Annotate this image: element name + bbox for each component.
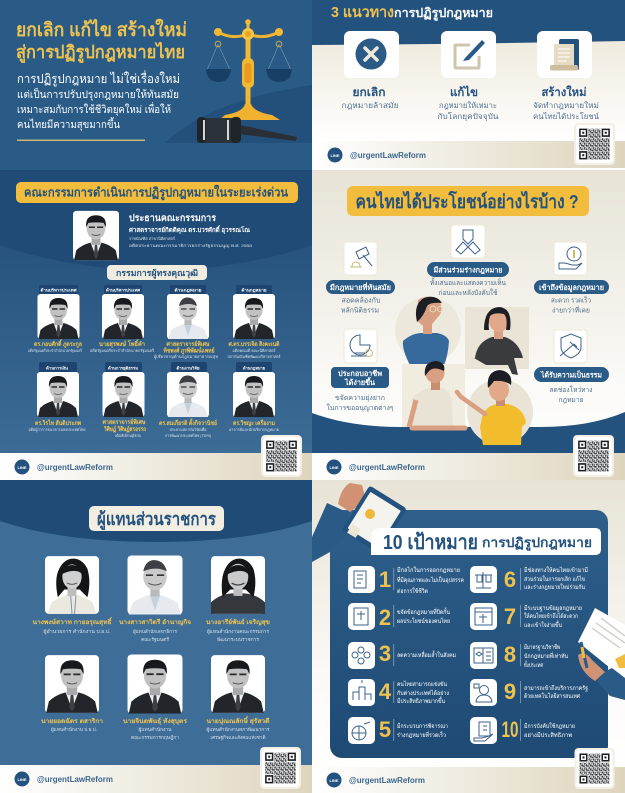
member 4: ด้านกฎหมาย <box>242 286 267 294</box>
benefit: access: ง่ายกว่าที่เคย <box>552 306 590 314</box>
QR code <box>261 435 302 477</box>
intro text: เหมาะสมกับการใช้ชีวิตยุคใหม่ เพื่อให้ <box>17 102 171 116</box>
benefit: access <box>534 242 609 314</box>
pill heading: ผู้แทนส่วนราชการ <box>97 509 217 531</box>
member 2: ด้านบริหารประเทศ <box>106 286 140 292</box>
goal 3 <box>348 641 456 669</box>
member 3: ศาสตราจารย์พิเศษ <box>166 340 210 348</box>
goal 9: ด้วยเทคโนโลยีสารสนเทศ <box>524 692 580 700</box>
goal 1: ต่อการใช้ชีวิต <box>397 587 428 595</box>
member 8: อาจารย์และนักบริหารกฎหมาย <box>229 427 279 432</box>
benefit: justice: กฎหมาย <box>558 397 584 404</box>
chair: ศาสตราจารย์กิตติคุณ ดร.บวรศักดิ์ อุวรรณโณ <box>129 225 250 234</box>
member 8: ด้านกฎหมาย <box>243 364 266 372</box>
title pill <box>371 528 601 555</box>
footer: @urgentLawReform <box>37 463 113 472</box>
member 5 <box>28 362 86 433</box>
goal 1 <box>348 566 464 595</box>
goal 5: 5 <box>379 717 391 742</box>
goal 4: 4 <box>379 679 392 704</box>
chair: ประธานคณะกรรมการ <box>129 212 217 224</box>
footer: LINE <box>17 465 27 470</box>
heading <box>16 18 187 64</box>
member 3: ทิชพงศ์ ภูรพิพัฒน์แพทย์ <box>164 346 215 356</box>
card: create: สร้างใหม่ <box>542 85 586 99</box>
member 7: ดร.สมเกียรติ ตั้งกิจวานิชย์ <box>159 417 217 427</box>
chair <box>73 211 253 260</box>
member 4: ศ.ดร.บรรเจิด สิงคะเนติ <box>228 340 280 348</box>
card: create: คนไทยได้ประโยชน์ <box>533 112 599 121</box>
icon: gavel <box>197 117 297 143</box>
icon: scales of justice <box>206 19 292 120</box>
banner <box>347 186 589 216</box>
member 1: อดีตรัฐมนตรีประจำสำนักนายกรัฐมนตรี <box>28 348 83 353</box>
goal 4 <box>348 679 449 706</box>
QR code <box>573 435 614 477</box>
goal 8 <box>470 642 568 669</box>
representative 6: ผู้แทนสำนักงานสภาพัฒนาการ <box>206 726 270 733</box>
paper with pen <box>578 608 625 700</box>
intro text: การปฏิรูปกฎหมาย ไม่ใช่เรื่องใหม่ <box>17 70 180 87</box>
benefit: modern law: สอดคล้องกับ <box>342 296 380 304</box>
illustration: woman in black <box>465 307 529 375</box>
icon: scroll <box>550 39 579 70</box>
goal 9: สามารถเข้าถึงบริการภาครัฐ <box>524 685 588 692</box>
footer: @urgentLawReform <box>37 775 113 784</box>
dark card <box>330 510 608 758</box>
member 2: นายสุรพงษ์ โพธิ์คำ <box>99 339 145 348</box>
title pill: 10 เป้าหมาย <box>383 531 478 554</box>
goal 7 <box>470 603 582 630</box>
illustration: man in yellow <box>457 370 533 445</box>
goal 8: 8 <box>504 642 516 667</box>
chair: ราชบัณฑิต สาขานิติศาสตร์ <box>129 236 176 241</box>
member 5: ดร.วิรไท สันติประภพ <box>35 419 81 427</box>
card: amend <box>438 31 498 121</box>
card: amend: แก้ไข <box>450 85 478 99</box>
heading: 3 แนวทาง <box>331 4 394 21</box>
goal 2: 2 <box>379 605 391 630</box>
member 3: ด้านกฎหมาย <box>174 286 202 294</box>
member 7: ประธานสถาบันวิจัยเพื่อ <box>170 427 207 432</box>
footer: LINE <box>17 777 27 782</box>
goal 5: ร่างกฎหมายที่รวดเร็ว <box>397 730 446 739</box>
heading <box>331 4 493 21</box>
benefit: justice <box>534 330 609 404</box>
member 4: อดีตคณบดี คณะนิติศาสตร์ <box>232 348 276 353</box>
subheading pill <box>107 265 207 280</box>
footer: @urgentLawReform <box>349 776 425 785</box>
goal 8: มีมาตรฐานวิชาชีพ <box>524 643 560 651</box>
member 2: อดีตรัฐมนตรีประจำสำนักนายกรัฐมนตรี <box>90 348 155 353</box>
card: amend: กฎหมายให้เหมาะ <box>439 101 497 110</box>
member 8: ดร.วิชญะ เครืองาม <box>233 419 275 427</box>
goal 8: ทั้งประเทศ <box>524 659 543 669</box>
representative 1 <box>32 556 113 635</box>
goal 1: ที่มีคุณภาพและไม่เป็นอุปสรรค <box>397 575 464 584</box>
benefit: access: สะดวก รวดเร็ว <box>551 296 591 304</box>
footer: @urgentLawReform <box>350 151 426 160</box>
benefit: participation <box>427 225 509 297</box>
icon: shield gavel <box>560 334 581 358</box>
representative 6: เศรษฐกิจและสังคมแห่งชาติ <box>210 734 266 741</box>
tablet with hand <box>312 483 407 562</box>
goal 10 <box>470 717 575 744</box>
footer <box>312 767 625 793</box>
goal 7: มีระบบฐานข้อมูลกฎหมาย <box>524 604 582 612</box>
curved shape behind scale <box>165 85 312 143</box>
intro text: แต่เป็นการปรับปรุงกฎหมายให้ทันสมัย <box>17 87 179 101</box>
card: create <box>533 31 599 121</box>
representative 2: นางสาวสาวิตรี อำนาญกิจ <box>119 618 191 626</box>
goal 2 <box>348 603 450 630</box>
representative 4: นายยอดฉัตร ตสาริกา <box>41 717 104 725</box>
representative 2: คณะรัฐมนตรี <box>141 636 170 643</box>
member 4 <box>228 285 281 359</box>
footer <box>0 453 312 480</box>
panel: 10 goals <box>312 480 625 793</box>
footer: LINE <box>329 778 339 783</box>
goal 2: ขจัดข้อกฎหมายที่ปิดกั้น <box>397 606 450 616</box>
banner: คนไทยได้ประโยชน์อย่างไรบ้าง ? <box>356 190 578 212</box>
benefit: livelihood <box>326 329 394 412</box>
goal 6: และร่างกฎหมายใหม่ร่วมกัน <box>524 583 585 591</box>
footer: LINE <box>329 465 339 470</box>
member 6 <box>102 362 146 439</box>
panel: government representatives <box>0 480 312 793</box>
member 1: ด้านบริหารประเทศ <box>40 286 77 292</box>
goal 4: กับต่างประเทศได้อย่าง <box>397 689 449 697</box>
benefit: modern law: มีกฎหมายที่ทันสมัย <box>330 281 391 292</box>
card: abolish <box>342 31 399 110</box>
goal 9 <box>470 679 588 706</box>
member 7: ด้านงานวิจัย <box>176 364 200 370</box>
member 5: ด้านการเงิน <box>46 364 68 370</box>
representative 6: นายปุณณลักษิ์ สุรัสวดี <box>206 716 270 725</box>
representative 1: ผู้อำนวยการ สำนักงาน ป.ย.ป. <box>44 628 110 635</box>
representative 2 <box>119 556 191 643</box>
member 3 <box>154 285 218 360</box>
QR code <box>574 123 615 165</box>
goal 10: อย่างมีประสิทธิภาพ <box>524 731 572 739</box>
benefit: modern law <box>326 242 395 314</box>
representative 6 <box>206 655 270 741</box>
QR code <box>260 747 301 789</box>
icon: pie and coins <box>350 335 372 356</box>
representative 4 <box>41 655 104 733</box>
card: abolish: กฎหมายล้าสมัย <box>342 101 398 110</box>
benefit: livelihood: ได้ง่ายขึ้น <box>344 376 376 387</box>
QR code <box>574 748 614 789</box>
illustration: man in beige <box>402 361 465 428</box>
footer <box>312 453 625 480</box>
banner <box>16 182 298 203</box>
heading: สู่การปฏิรูปกฎหมายไทย <box>16 41 185 64</box>
representative 3: ผู้แทนสำนักงานคณะกรรมการ <box>207 628 270 635</box>
goal 6: 6 <box>504 567 516 592</box>
benefit: access: เข้าถึงข้อมูลกฎหมาย <box>539 283 604 293</box>
goal 4: คนไทยสามารถแข่งขัน <box>397 680 447 688</box>
goal 6: ส่วนร่วมในการยกเลิก แก้ไข <box>524 575 585 583</box>
icon: edit <box>455 40 485 68</box>
heading: ยกเลิก แก้ไข สร้างใหม่ <box>16 18 187 40</box>
card: abolish: ยกเลิก <box>352 86 386 99</box>
panel: committee <box>0 170 312 480</box>
goal 6 <box>470 566 588 593</box>
chair: อดีตประธานคณะกรรมาธิการยกร่างรัฐธรรมนูญ พ.ศ. 2558 <box>129 243 253 249</box>
icon: gavel <box>350 247 372 267</box>
member 6: วิศิษฏ์ วิศิษฏ์สรอรรถ <box>104 425 146 433</box>
member 2 <box>90 285 155 353</box>
card: create: จัดทำกฎหมายใหม่ <box>533 101 599 110</box>
member 6: ศาสตราจารย์พิเศษ <box>102 418 146 426</box>
goal 1: มีกลไกในการออกกฎหมาย <box>397 566 460 574</box>
goal 3: 3 <box>379 641 391 666</box>
member 8 <box>229 362 279 432</box>
goal 7: และเข้าใจง่ายขึ้น <box>524 619 562 629</box>
representative 1: นางพงษ์สวาท กายอรุณสุทธิ์ <box>32 617 113 626</box>
panel: benefits <box>312 170 625 480</box>
intro text: คนไทยมีความสุขมากขึ้น <box>17 117 120 131</box>
benefit: livelihood: ขจัดความยุ่งยาก <box>335 394 385 402</box>
member 5: อดีตผู้ว่าการธนาคารแห่งประเทศไทย <box>28 427 86 433</box>
footer: @urgentLawReform <box>349 463 425 472</box>
representative 5: นายจินตพันธุ์ ทังสุบุตร <box>123 717 188 725</box>
icon: cross <box>356 38 386 70</box>
representative 5: คณะกรรมการกฤษฎีกา <box>131 734 179 740</box>
card: amend: กับโลกยุคปัจจุบัน <box>438 112 498 121</box>
icon: info hand <box>559 247 582 269</box>
representative 3: พัฒนาระบบราชการ <box>217 636 260 642</box>
goal 7: ให้คนไทยเข้าถึงได้สะดวก <box>524 612 578 620</box>
representative 3: นางอารีย์พันธ์ เจริญสุข <box>206 618 270 626</box>
member 6: อดีตอธิบดีกรมยุติธรรม <box>115 433 141 439</box>
benefit: justice: ลดช่องโหว่ทาง <box>550 385 592 394</box>
representative 5: ผู้แทนสำนักงาน <box>138 726 172 733</box>
benefit: modern law: หลักนิติธรรม <box>341 306 379 314</box>
panel: 3 approaches <box>312 0 625 170</box>
representative 2: ผู้แทนสำนักเลขาธิการ <box>133 628 178 635</box>
goal 1: 1 <box>379 567 391 592</box>
benefit: justice: ได้รับความเป็นธรรม <box>540 370 602 380</box>
member 6: ด้านการยุติธรรม <box>108 364 138 372</box>
benefit: livelihood: ในการขออนุญาตต่างๆ <box>326 403 394 412</box>
member 3: ผู้เชี่ยวชาญด้านกฎหมายสาธารณสุข <box>154 354 218 360</box>
goal 10: มีการบังคับใช้กฎหมาย <box>524 722 575 730</box>
goal 8: นักกฎหมายที่เท่าทัน <box>524 652 568 660</box>
subheading pill: กรรมการผู้ทรงคุณวุฒิ <box>116 268 198 279</box>
member 4: สถาบันบัณฑิตพัฒนบริหารศาสตร์ <box>228 354 281 359</box>
heading: การปฏิรูปกฎหมาย <box>394 6 493 21</box>
intro text <box>17 70 180 131</box>
benefit: livelihood: ประกอบอาชีพ <box>338 369 382 378</box>
benefit: participation: ทั้งเสนอและแสดงความเห็น <box>430 276 506 287</box>
goal 2: ผลประโยชน์ของคนไทย <box>397 617 450 625</box>
icon: hands <box>456 230 480 254</box>
goal 9: 9 <box>504 679 516 704</box>
member 7 <box>159 362 217 438</box>
representative 4: ผู้แทนสำนักงาน ป.ย.ป. <box>51 726 97 733</box>
member 1 <box>28 285 83 353</box>
member 7: การพัฒนาประเทศไทย (TDRI) <box>165 433 212 438</box>
representative 3 <box>206 556 270 642</box>
goal 4: มีประสิทธิภาพมากขึ้น <box>397 695 445 705</box>
banner: คณะกรรมการดำเนินการปฏิรูปกฎหมายในระยะเร่งด่วน <box>24 184 288 200</box>
benefit: participation: ก่อนและหลังบังคับใช้ <box>438 288 498 297</box>
title pill: การปฏิรูปกฎหมาย <box>482 535 592 551</box>
illustration: woman in blue <box>395 296 461 365</box>
footer: LINE <box>330 153 340 158</box>
wave <box>312 412 625 453</box>
member 1: ดร.กอบศักดิ์ ภูตระกูล <box>34 339 82 349</box>
panel: intro <box>0 0 312 170</box>
goal 5 <box>348 717 448 744</box>
benefit: participation: มีส่วนร่วมร่างกฎหมาย <box>433 266 502 274</box>
goal 7: 7 <box>504 604 516 629</box>
footer <box>0 765 312 793</box>
footer <box>312 141 625 168</box>
goal 10: 10 <box>502 717 518 742</box>
goal 5: มีกระบวนการพิจารณา <box>397 722 448 730</box>
representative 5 <box>123 655 188 740</box>
goal 3: ลดความเหลื่อมล้ำในสังคม <box>397 649 456 659</box>
goal 6: มีช่องทางให้คนไทยเข้ามามี <box>524 566 588 574</box>
